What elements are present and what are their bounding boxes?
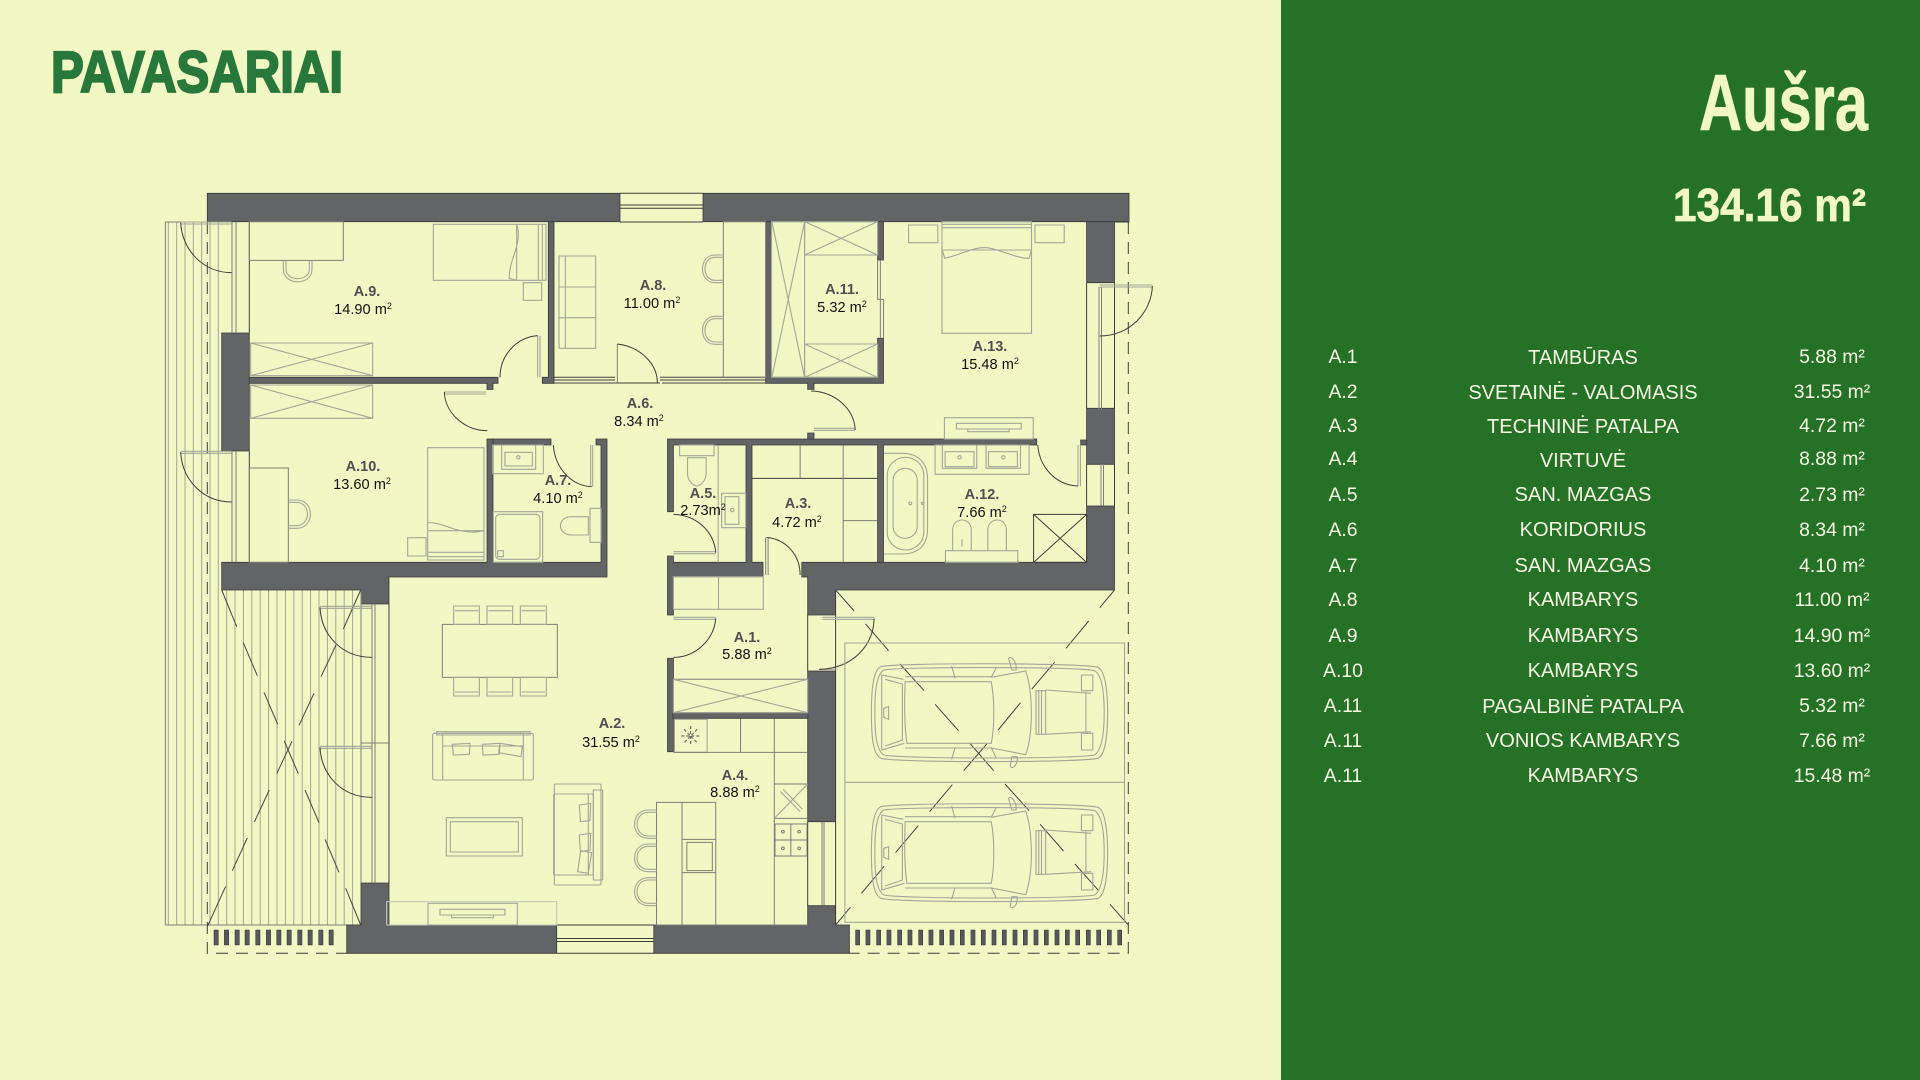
row A.4: A.4: [1328, 448, 1358, 470]
label: A.2: [582, 716, 640, 751]
label: A.8: A.8.: [640, 278, 666, 294]
terrace decking: [165, 222, 361, 925]
row A.1: A.1: [1328, 346, 1358, 368]
A.8 door: [617, 344, 657, 383]
bar stools: [635, 810, 657, 906]
row A.10: 13.60 m²: [1794, 660, 1871, 682]
row A.3: 4.72 m²: [1799, 415, 1865, 437]
label: A.9: [334, 284, 392, 318]
label: A.13: 15.48 m: [961, 357, 1014, 373]
kitchen cabinets: [673, 718, 808, 925]
door: A.9: [500, 336, 540, 377]
row A.2: 31.55 m²: [1794, 381, 1871, 403]
row A.11 room: [1324, 765, 1871, 787]
kitchen fridge: [674, 719, 707, 752]
label: A.4: [710, 768, 760, 801]
label: A.9: A.9.: [354, 284, 380, 300]
parking bays: [845, 643, 1125, 922]
row A.11 bathroom: VONIOS KAMBARYS: [1486, 730, 1680, 752]
A.13 TV unit: [944, 418, 1033, 439]
row A.2: A.2: [1328, 381, 1358, 403]
structural thin lines and windows: [249, 193, 1129, 953]
A.12 bathtub: [884, 453, 928, 554]
row A.3: TECHNINĖ PATALPA: [1487, 415, 1680, 438]
A.13 bed: [942, 222, 1032, 333]
label: A.2: 2: [635, 734, 640, 744]
label: A.10: A.10.: [346, 459, 380, 475]
row A.11 room: 15.48 m²: [1794, 765, 1871, 787]
A.1 cabinet: [673, 577, 763, 609]
label: A.7: 4.10 m: [533, 491, 578, 507]
parking bars: [856, 930, 1122, 945]
row A.9: A.9: [1328, 625, 1358, 647]
A.8 shelf: [559, 256, 596, 348]
row A.11 bathroom: 7.66 m²: [1799, 730, 1865, 752]
label: A.3: 2: [817, 514, 822, 524]
label: A.8: [624, 278, 680, 312]
door: A.12: [1038, 445, 1080, 486]
label: A.13: [961, 339, 1019, 373]
label: A.2: 31.55 m: [582, 735, 635, 751]
row A.2: [1328, 381, 1871, 404]
A.1 wardrobe: [673, 679, 808, 713]
label: A.10: 13.60 m: [333, 477, 386, 493]
coffee table: [446, 818, 522, 856]
label: A.9: 2: [387, 301, 392, 311]
apartment name: Aušra: [1699, 58, 1868, 147]
label: A.4: 2: [755, 784, 760, 794]
panel: right green sidebar: [1281, 0, 1920, 1080]
label: A.6: 8.34 m: [614, 414, 659, 430]
row A.9: KAMBARYS: [1528, 625, 1638, 647]
row A.11 auxiliary: [1324, 695, 1865, 718]
row A.7: [1328, 555, 1865, 577]
label: A.10: 2: [386, 476, 391, 486]
row A.11 auxiliary: A.11: [1324, 695, 1362, 717]
label: A.1: 2: [767, 646, 772, 656]
row A.2: SVETAINĖ - VALOMASIS: [1468, 381, 1698, 404]
label: A.8: 2: [675, 295, 680, 305]
A.7 toilet: [560, 508, 601, 542]
row A.3: A.3: [1328, 415, 1358, 437]
label: A.3: A.3.: [785, 496, 811, 512]
A.10 bed: [408, 448, 484, 560]
terrace door lower: [320, 746, 372, 797]
A.12 toilet and bidet: [945, 520, 1018, 562]
south bars: [214, 930, 333, 945]
row A.4: 8.88 m²: [1799, 448, 1865, 470]
door: terrace A.10: [181, 451, 232, 502]
A.10 desk and chair: [249, 468, 310, 562]
A.13 nightstands: [909, 225, 1064, 243]
A.9 wardrobe: [251, 343, 373, 376]
label: A.1: [722, 630, 772, 663]
label: A.5: 2: [721, 502, 726, 512]
label: A.6: 2: [659, 413, 664, 423]
terrace door upper: [320, 606, 372, 657]
row A.4: VIRTUVĖ: [1540, 449, 1626, 472]
left wing furniture: [181, 222, 601, 562]
A.1 inner door: [673, 617, 716, 657]
A.10 wardrobe: [251, 385, 373, 418]
row A.5: [1328, 484, 1865, 506]
door: A.13 balcony: [1100, 285, 1152, 336]
A.7 shower: [493, 512, 543, 562]
label: A.1: 5.88 m: [722, 647, 767, 663]
row A.10: KAMBARYS: [1528, 660, 1638, 682]
A.9 bed: [433, 224, 546, 300]
row A.11 auxiliary: 5.32 m²: [1799, 695, 1865, 717]
row A.5: A.5: [1328, 484, 1358, 506]
kitchen hob: [775, 824, 807, 856]
row A.1: [1328, 346, 1865, 369]
exterior dashed outline: [207, 222, 1128, 953]
label: A.12: 2: [1002, 504, 1007, 514]
label: A.11: 2: [862, 299, 867, 309]
label: A.12: 7.66 m: [957, 505, 1002, 521]
TV unit: [387, 902, 557, 925]
row A.9: 14.90 m²: [1794, 625, 1871, 647]
A.7 door: [553, 445, 593, 487]
row A.11 room: KAMBARYS: [1528, 765, 1638, 787]
row A.8: 11.00 m²: [1794, 589, 1870, 611]
label: A.13: A.13.: [973, 339, 1007, 355]
A.7 sink: [493, 445, 543, 474]
row A.8: KAMBARYS: [1528, 589, 1638, 611]
label: A.10: [333, 459, 391, 493]
row A.8: [1328, 589, 1870, 611]
A.12 shaft: [1034, 514, 1087, 562]
row A.11 auxiliary: PAGALBINĖ PATALPA: [1482, 695, 1684, 718]
label: A.11: 5.32 m: [817, 300, 862, 316]
label: A.11: [817, 282, 867, 316]
row A.7: SAN. MAZGAS: [1515, 555, 1651, 577]
row A.6: A.6: [1328, 519, 1358, 541]
label: A.3: [772, 496, 822, 531]
living room furniture: [214, 606, 657, 945]
row A.6: KORIDORIUS: [1520, 519, 1646, 541]
A.8 desk: [723, 222, 766, 378]
garage roof overlay dashes: [836, 590, 1128, 925]
row A.6: [1328, 519, 1865, 541]
terrace roof overlay dashes: [207, 590, 361, 927]
row A.4: [1328, 448, 1865, 472]
row A.11 bathroom: A.11: [1324, 730, 1362, 752]
row A.1: 5.88 m²: [1799, 346, 1865, 368]
label: A.6: [614, 396, 664, 430]
kitchen island: [657, 802, 716, 925]
label: A.4: A.4.: [722, 768, 748, 784]
label: A.5: A.5.: [690, 486, 716, 502]
row A.11 room: A.11: [1324, 765, 1362, 787]
A.3 door: [766, 537, 800, 575]
label: A.8: 11.00 m: [624, 296, 675, 312]
A.5 toilet: [680, 445, 714, 486]
south-east furniture: [657, 577, 1125, 945]
label: A.12: [957, 487, 1007, 521]
dining table: [442, 606, 557, 696]
car 2: [871, 798, 1108, 908]
A.3 shelves: [752, 445, 878, 562]
walls: [207, 193, 1129, 953]
east wing furniture: [673, 222, 1152, 575]
brand title: PAVASARIAI: [51, 40, 343, 105]
terrace and glazing frames: [232, 222, 1104, 905]
row A.5: SAN. MAZGAS: [1515, 484, 1651, 506]
row A.5: 2.73 m²: [1799, 484, 1865, 506]
A.11 sliding door: [878, 260, 883, 338]
A.12 double sink: [935, 445, 1029, 474]
door: A.13: [811, 391, 855, 430]
car 1: [871, 658, 1108, 768]
row A.6: 8.34 m²: [1799, 519, 1865, 541]
door: A.10: [444, 392, 487, 431]
label: A.2: A.2.: [599, 716, 625, 732]
row A.11 bathroom: [1324, 730, 1865, 752]
label: A.12: A.12.: [965, 487, 999, 503]
label: A.3: 4.72 m: [772, 515, 817, 531]
label: A.5: [680, 486, 726, 519]
label: A.7: [533, 473, 583, 507]
label: A.4: 8.88 m: [710, 785, 755, 801]
icon: fridge snowflake: [681, 726, 700, 746]
A.5 sink: [718, 445, 746, 562]
label: A.1: A.1.: [734, 630, 760, 646]
A.9 desk and chair: [249, 222, 343, 282]
row A.7: A.7: [1328, 555, 1358, 577]
row A.8: A.8: [1328, 589, 1358, 611]
label: A.7: 2: [578, 490, 583, 500]
row A.1: TAMBŪRAS: [1528, 346, 1638, 369]
sofa: [433, 732, 533, 780]
A.11 wardrobes: [772, 222, 878, 377]
armchair sofa: [554, 784, 603, 885]
door: terrace A.9: [181, 222, 232, 273]
label: A.13: 2: [1014, 356, 1019, 366]
A.8 chairs: [702, 255, 723, 344]
total area: 134.16 m²: [1673, 179, 1866, 231]
row A.10: [1323, 660, 1871, 682]
row A.3: [1328, 415, 1865, 438]
A.1 entrance door: [819, 617, 874, 669]
floor plan: [165, 193, 1152, 953]
label: A.11: A.11.: [825, 282, 859, 298]
panel: room schedule table: [1323, 346, 1871, 787]
label: A.5: 2.73m: [680, 503, 721, 519]
row A.10: A.10: [1323, 660, 1363, 682]
row A.9: [1328, 625, 1871, 647]
label: A.9: 14.90 m: [334, 302, 387, 318]
A.8 room furniture: [559, 222, 766, 383]
label: A.6: A.6.: [627, 396, 653, 412]
row A.7: 4.10 m²: [1799, 555, 1865, 577]
A.5 door: [673, 514, 716, 554]
label: A.7: A.7.: [545, 473, 571, 489]
